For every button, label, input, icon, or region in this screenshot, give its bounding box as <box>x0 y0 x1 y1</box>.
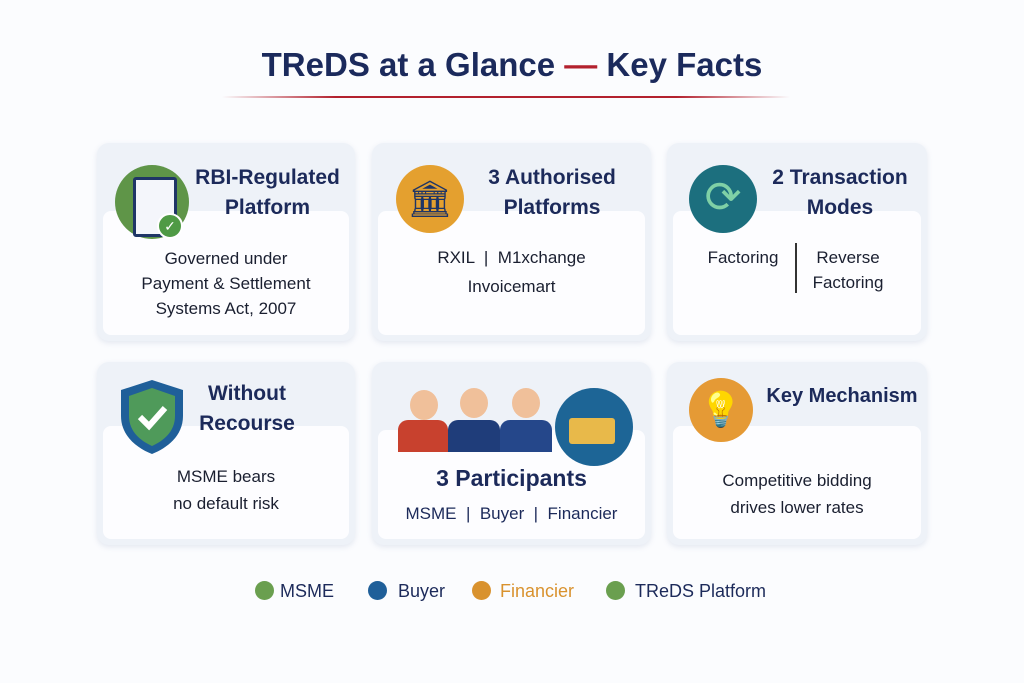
heading <box>199 382 295 435</box>
text <box>141 249 311 318</box>
text: MSME bears <box>177 467 275 486</box>
heading: 2 Transaction <box>772 166 908 189</box>
icon: clipboard: ✓ <box>164 218 176 234</box>
text: RXIL | M1xchange <box>437 248 586 267</box>
panel: Key Mechanism <box>667 362 927 545</box>
text <box>722 471 872 517</box>
text: Payment & Settlement <box>141 274 311 293</box>
heading: Key Mechanism <box>766 385 918 407</box>
text: MSME | Buyer | Financier <box>406 504 617 523</box>
panel: Transaction Modes: Factoring <box>813 273 883 292</box>
heading: Modes <box>807 196 873 219</box>
panel: Transaction Modes: Reverse <box>816 248 880 267</box>
legend <box>255 581 766 601</box>
legend: Financier <box>500 581 574 601</box>
legend: TReDS Platform <box>635 581 766 601</box>
text: Governed under <box>165 249 287 268</box>
icon: cycle: ⟳ <box>705 173 741 222</box>
text <box>437 248 586 296</box>
icon: bank: 🏛 <box>407 178 453 219</box>
icon: bank <box>396 165 464 233</box>
text <box>173 467 279 513</box>
legend: MSME <box>280 581 334 601</box>
panel: RBI-Regulated <box>97 143 355 341</box>
title: TReDS at a Glance — Key Facts <box>262 46 762 83</box>
panel: Authorised Platforms <box>372 143 651 341</box>
icon: bulb <box>689 378 753 442</box>
panel: Participants <box>372 362 651 545</box>
text: Competitive bidding <box>722 471 872 490</box>
icon: people <box>398 388 552 452</box>
heading: Recourse <box>199 412 295 435</box>
icon: financier <box>555 388 633 466</box>
icon: cycle <box>689 165 757 233</box>
heading: 3 Participants <box>436 465 587 491</box>
icon: shield <box>121 380 183 454</box>
heading <box>772 166 908 219</box>
text: no default risk <box>173 494 279 513</box>
heading: Platforms <box>504 196 600 219</box>
heading: 3 Authorised <box>488 166 616 189</box>
heading <box>488 166 616 219</box>
panel: Without Recourse <box>97 362 355 545</box>
heading: Platform <box>225 196 310 219</box>
icon: clipboard <box>115 165 189 239</box>
text: drives lower rates <box>730 498 864 517</box>
legend: Buyer <box>398 581 445 601</box>
heading: Without <box>208 382 286 405</box>
panel: Transaction Modes <box>667 143 927 341</box>
heading: RBI-Regulated <box>195 166 340 189</box>
heading <box>195 166 340 219</box>
icon: bulb: 💡 <box>700 391 742 429</box>
text: Systems Act, 2007 <box>156 299 296 318</box>
text: Invoicemart <box>468 277 555 296</box>
text: Factoring <box>708 248 778 267</box>
